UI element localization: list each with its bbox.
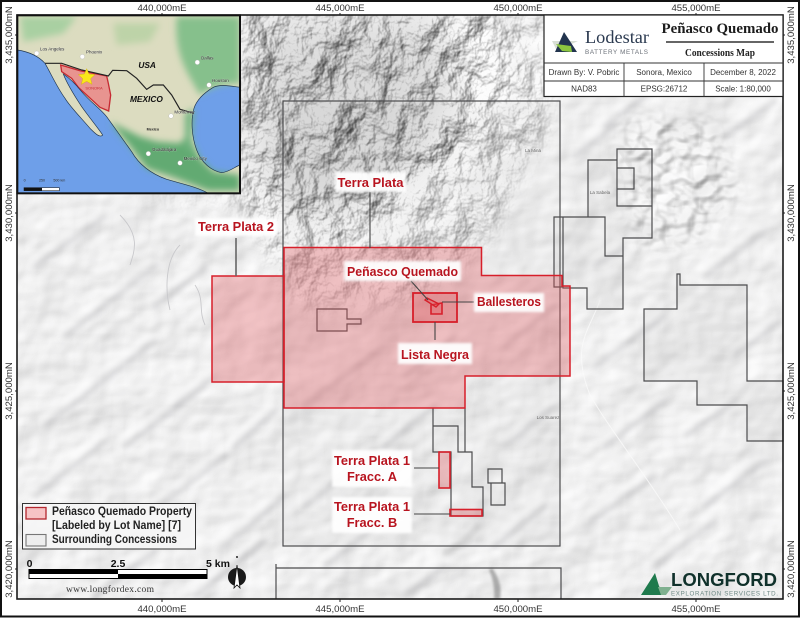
lot: Lista Negra (413, 293, 457, 322)
lot: Terra Plata 1 Fracc. A (439, 452, 450, 488)
coordinate ticks and labels: 455,000mE (671, 3, 721, 14)
concession: east block (644, 274, 783, 441)
divider under title (666, 41, 774, 43)
coordinate ticks and labels: 3,430,000mN (4, 184, 15, 242)
concession: north-east cluster (554, 149, 652, 309)
scale bar: 2.5 (111, 558, 125, 570)
label: Terra Plata (335, 172, 406, 248)
city labels: Mexico City (184, 156, 208, 161)
text: Longford wordmark: LONGFORD (671, 570, 777, 590)
label: Peñasco Quemado (344, 261, 461, 300)
label: Lista Negra (398, 322, 472, 364)
city labels: Houston (212, 78, 229, 83)
lot: Terra Plata 2 (212, 276, 284, 382)
text: concessions legend entry: Surrounding Concessions (52, 534, 177, 546)
concession: inner block (317, 309, 361, 331)
coordinate ticks and labels: 3,425,000mN (786, 362, 797, 420)
coordinate ticks and labels: 445,000mE (315, 3, 365, 14)
table cells: Scale: 1:80,000 (715, 84, 771, 94)
label: Terra Plata 1 Fracc. A: Fracc. A (347, 469, 397, 484)
table cells: Drawn By: V. Pobric (549, 68, 619, 77)
coordinate ticks and labels: 3,420,000mN (786, 540, 797, 598)
label: Ballesteros (442, 293, 544, 312)
coordinate ticks and labels: 3,435,000mN (4, 6, 15, 64)
star: project location (78, 69, 95, 84)
concession: south-central cluster (433, 408, 505, 516)
icon: Longford mountain (641, 573, 672, 595)
text: legend note: [Labeled by Lot Name] [7] (52, 520, 181, 532)
table cells (549, 68, 776, 94)
coordinate ticks and labels: 440,000mE (137, 604, 187, 615)
label: Terra Plata 1 Fracc. A: Terra Plata 1 (334, 453, 410, 468)
city markers (34, 51, 211, 165)
city labels: Los Angeles (40, 47, 65, 52)
label: Terra Plata 1 Fracc. A (332, 450, 439, 487)
Sonora state (61, 65, 111, 111)
city labels: MEXICO (130, 94, 163, 104)
coordinate ticks and labels: 3,425,000mN (4, 362, 15, 420)
text: property legend entry: Peñasco Quemado Property (52, 506, 193, 518)
label: Terra Plata: Terra Plata (338, 175, 404, 190)
coordinate ticks and labels: 3,430,000mN (786, 184, 797, 242)
city labels: Guadalajara (152, 147, 177, 152)
lot: Peñasco Quemado (425, 298, 439, 307)
Pacific coastline (17, 50, 208, 193)
vegetation tint (20, 17, 240, 191)
coordinate ticks and labels: 455,000mE (671, 604, 721, 615)
icon: north arrow (228, 556, 246, 588)
coordinate ticks and labels: 3,420,000mN (4, 540, 15, 598)
property lots (212, 248, 570, 516)
city labels: Phoenix (86, 50, 103, 55)
text: Lodestar wordmark: Lodestar (585, 27, 649, 47)
coordinate ticks and labels: 445,000mE (315, 604, 365, 615)
label: Terra Plata 2 (195, 218, 277, 276)
Gulf of Mexico coastline (192, 86, 240, 173)
inset scale bar: 500 km (53, 179, 65, 183)
label: Lista Negra: Lista Negra (401, 347, 470, 362)
panel: location inset map (17, 15, 240, 193)
scale bar: 5 km (206, 558, 230, 570)
lot: Ballesteros (431, 303, 442, 314)
city labels: Mexico (147, 127, 160, 131)
panel: legend (22, 504, 196, 549)
place names: Los Suarez (537, 415, 560, 420)
inset scale bar: 0 (24, 179, 26, 183)
place names (525, 148, 611, 420)
city labels: Monterrey (174, 109, 195, 114)
coordinate ticks and labels: 450,000mE (493, 604, 543, 615)
lot: Terra Plata 1 Fracc. B (450, 510, 482, 516)
heading: map title: Peñasco Quemado (662, 21, 778, 37)
table cells: Sonora, Mexico (636, 68, 692, 77)
scale bar: 0 (27, 558, 33, 570)
city labels (40, 47, 229, 161)
concession: bottom block (276, 564, 561, 599)
international border (45, 63, 194, 113)
table cells: EPSG:26712 (641, 84, 688, 94)
coordinate ticks and labels: 440,000mE (137, 3, 187, 14)
city labels: SONORA (85, 85, 103, 90)
scale bar (27, 558, 230, 579)
label: Ballesteros: Ballesteros (477, 294, 541, 309)
label: Peñasco Quemado: Peñasco Quemado (347, 264, 458, 279)
city labels: USA (138, 60, 156, 70)
table cells: December 8, 2022 (710, 68, 776, 77)
place names: La Sabela (590, 190, 611, 195)
table cells: NAD83 (571, 84, 597, 94)
panel: title block (544, 15, 783, 96)
surrounding concessions (276, 101, 783, 599)
city labels: Dallas (201, 55, 214, 60)
logo: Longford (641, 570, 778, 598)
concession: Terra Plata outer block (283, 101, 560, 546)
place names: La Mina (525, 148, 541, 153)
label: Terra Plata 1 Fracc. B (332, 497, 450, 533)
inset scale bar (24, 179, 65, 191)
label: Terra Plata 1 Fracc. B: Terra Plata 1 (334, 499, 410, 514)
label: Terra Plata 2: Terra Plata 2 (198, 219, 274, 234)
icon: Lodestar star logo (552, 32, 578, 52)
inset scale bar: 250 (39, 179, 45, 183)
lot: Terra Plata (284, 248, 570, 408)
swatch: surrounding concessions (26, 534, 46, 546)
text: Longford tagline: EXPLORATION SERVICES LTD. (671, 590, 778, 598)
coordinate ticks and labels: 450,000mE (493, 3, 543, 14)
text: Battery Metals: BATTERY METALS (585, 49, 648, 56)
heading: map subtitle: Concessions Map (685, 48, 755, 59)
coordinate ticks and labels: 3,435,000mN (786, 6, 797, 64)
land mass (17, 15, 240, 193)
label: Terra Plata 1 Fracc. B: Fracc. B (347, 515, 397, 530)
text: website: www.longfordex.com (66, 584, 155, 595)
swatch: property (26, 508, 46, 519)
